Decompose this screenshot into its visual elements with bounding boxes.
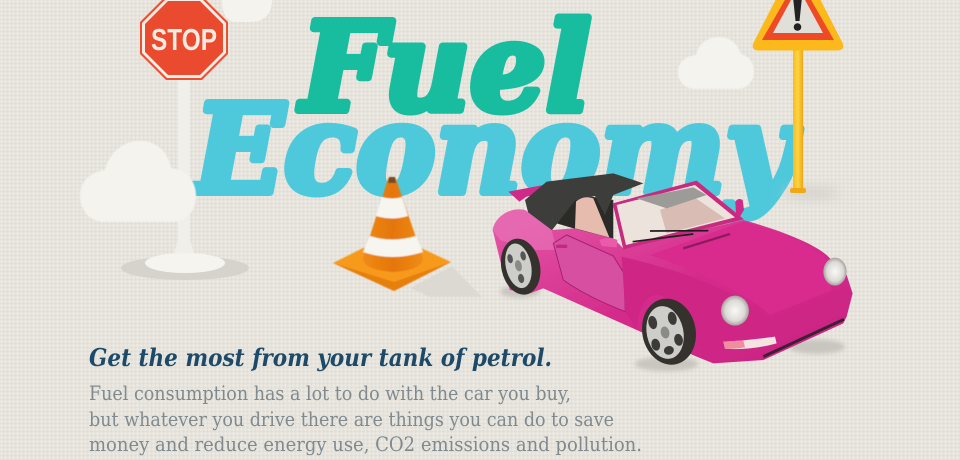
shadow: cone bbox=[410, 266, 482, 297]
icon: small cloud behind stop sign bbox=[222, 0, 272, 22]
body line 3: money and reduce energy use, CO2 emissions and pollution. bbox=[89, 432, 642, 456]
cowl gap bbox=[683, 234, 730, 248]
sign text: STOP bbox=[151, 22, 217, 57]
headlights bbox=[721, 296, 749, 326]
front fender bbox=[622, 257, 772, 347]
shadow patches bbox=[500, 286, 540, 298]
car body bbox=[493, 209, 853, 363]
interior shadow bbox=[540, 195, 613, 240]
icon: left cloud bbox=[80, 141, 196, 222]
illustration: pink convertible car bbox=[493, 173, 853, 370]
cone body bbox=[363, 177, 423, 272]
shadow: stop sign base bbox=[121, 256, 249, 280]
heading: Get the most from your tank of petrol. bbox=[89, 343, 552, 372]
octagon bbox=[140, 0, 228, 80]
cone base bbox=[333, 248, 451, 291]
front wheel bbox=[636, 294, 702, 370]
body line 2: but whatever you drive there are things you can do to save bbox=[89, 407, 614, 431]
car spoiler bbox=[508, 179, 580, 202]
mirror bbox=[735, 199, 744, 217]
door mirror bbox=[599, 238, 617, 247]
icon: traffic cone bbox=[333, 177, 451, 291]
seat bbox=[575, 197, 609, 237]
nose and grille bbox=[763, 319, 844, 357]
hood bbox=[650, 222, 832, 315]
icon: right cloud bbox=[678, 37, 754, 89]
body text bbox=[89, 381, 642, 456]
sign pole and base bbox=[174, 76, 194, 253]
door handle bbox=[556, 245, 567, 248]
exclamation mark bbox=[793, 0, 802, 21]
body line 1: Fuel consumption has a lot to do with the car you buy, bbox=[89, 381, 571, 405]
front lamp bbox=[723, 337, 777, 349]
title line: Economy: Economy bbox=[191, 77, 801, 221]
windshield glass bbox=[617, 185, 735, 245]
white stripes bbox=[376, 197, 408, 218]
icon: warning sign bbox=[753, 0, 843, 193]
title: Fuel Economy bbox=[191, 0, 801, 221]
shadow: warning sign bbox=[784, 188, 840, 198]
shadow: car bbox=[500, 286, 845, 371]
icon: stop sign bbox=[140, 0, 228, 273]
windshield frame bbox=[613, 181, 744, 249]
rear wheel bbox=[496, 235, 545, 298]
door panel bbox=[553, 235, 625, 312]
rear fender highlight bbox=[493, 209, 557, 250]
wipers bbox=[633, 231, 708, 242]
soft top bbox=[525, 173, 643, 231]
